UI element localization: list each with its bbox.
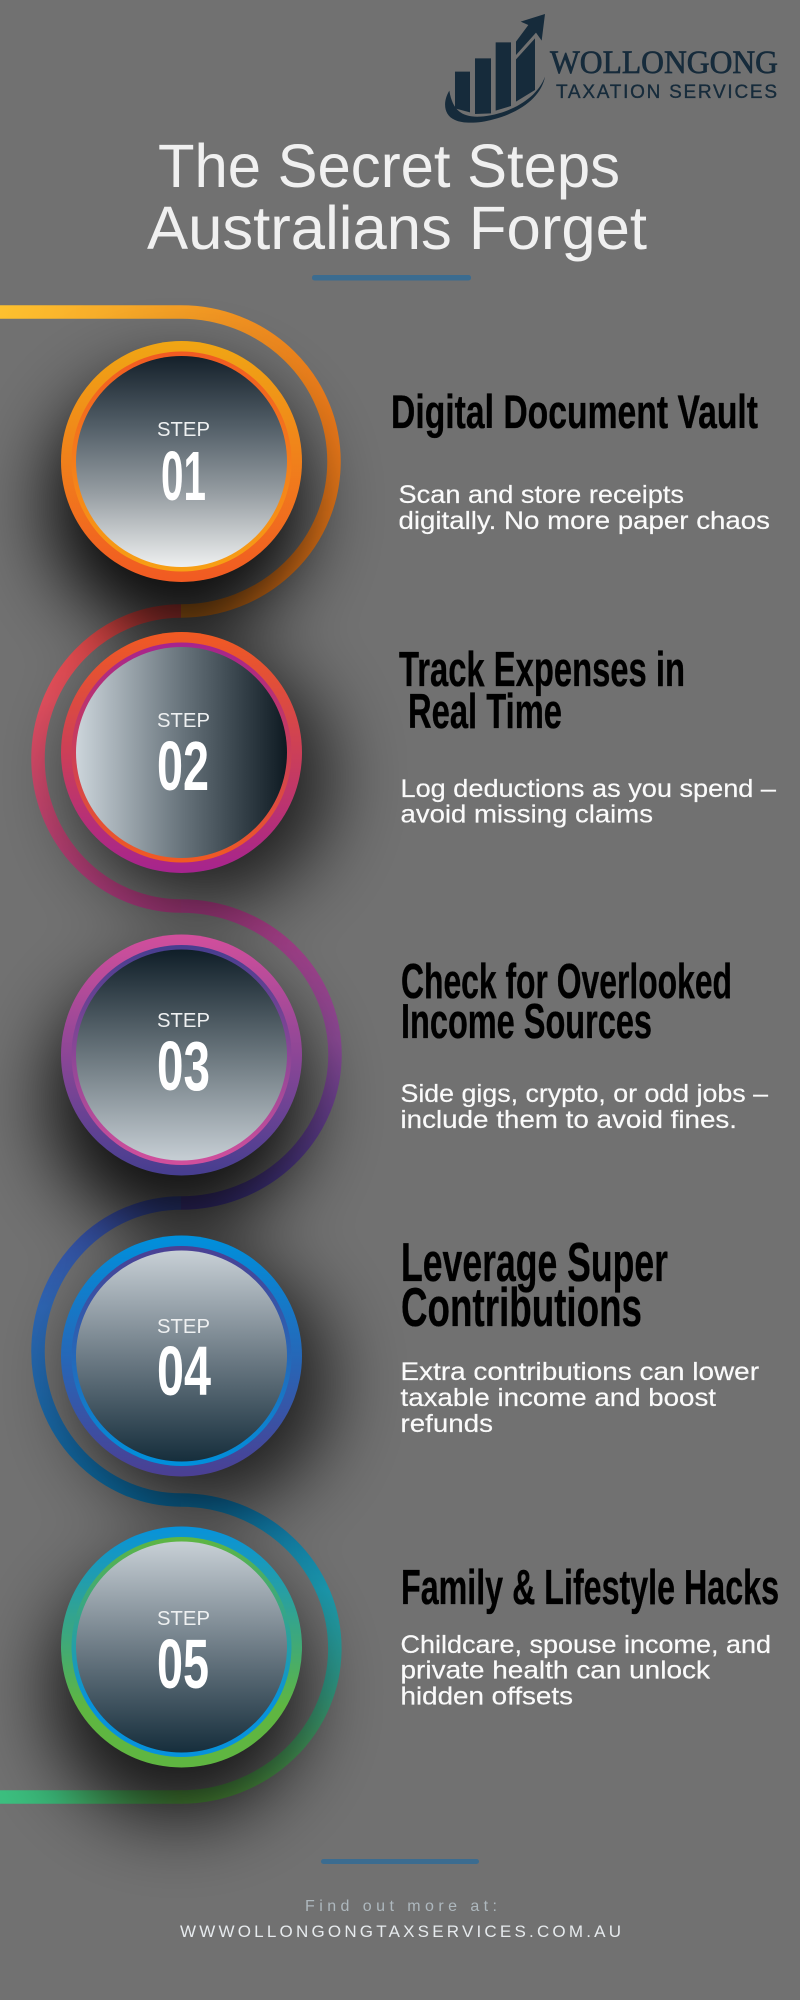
- logo wordmark: WOLLONGONG: [550, 45, 778, 81]
- body: step 2: Log deductions as you spend –: [400, 775, 776, 803]
- body: step 4: [400, 1358, 759, 1438]
- body: step 5: [400, 1631, 771, 1710]
- icon: rising bar chart with arrow: [445, 14, 545, 123]
- panel: step 2 text: [399, 643, 776, 828]
- footer call to action: Find out more at:: [305, 1898, 497, 1915]
- step 02 badge: STEP: [157, 710, 210, 732]
- step 03 badge: 03: [157, 1027, 210, 1105]
- badge drop shadows: [50, 377, 331, 1820]
- step 01 badge: [61, 341, 302, 582]
- logo: Wollongong Taxation Services: [445, 14, 778, 123]
- body: step 4: taxable income and boost: [400, 1384, 716, 1412]
- panel: step 1 text: [391, 385, 770, 535]
- body: step 5: Childcare, spouse income, and: [400, 1631, 771, 1659]
- heading: Check for Overlooked Income Sources: [401, 955, 732, 1049]
- body: step 4: Extra contributions can lower: [400, 1358, 759, 1386]
- step 05 badge: [61, 1526, 302, 1768]
- body: step 2: [400, 775, 776, 828]
- panel: step 4 text: [400, 1231, 759, 1438]
- panel: step 5 text: [400, 1561, 779, 1710]
- title: The Secret Steps: [158, 132, 620, 200]
- title: [147, 132, 647, 262]
- step 05 badge: STEP: [157, 1608, 210, 1630]
- footer call to action: WWWOLLONGONGTAXSERVICES.COM.AU: [180, 1922, 621, 1941]
- step 03 badge: STEP: [157, 1010, 210, 1032]
- body: step 1: Scan and store receipts: [398, 481, 684, 509]
- panel: step 3 text: [400, 955, 768, 1134]
- step 03 badge: [61, 934, 302, 1176]
- footer call to action: [180, 1898, 621, 1941]
- connector ribbon: [0, 312, 335, 1797]
- step 02 badge: 02: [157, 727, 209, 805]
- step 05 badge: 05: [157, 1625, 209, 1703]
- step 01 badge: STEP: [157, 419, 210, 441]
- heading: Leverage Super Contributions: [401, 1231, 668, 1338]
- heading: Track Expenses in Real Time: [399, 643, 685, 739]
- heading: Track Expenses in Real Time: Real Time: [408, 685, 562, 739]
- step 02 badge: [61, 632, 302, 873]
- body: step 2: avoid missing claims: [400, 800, 653, 828]
- step 04 badge: 04: [157, 1332, 211, 1410]
- step 04 badge: [61, 1236, 302, 1476]
- body: step 5: hidden offsets: [400, 1682, 573, 1710]
- body: step 1: digitally. No more paper chaos: [398, 507, 770, 535]
- heading: Check for Overlooked Income Sources: Income Sources: [401, 995, 652, 1049]
- body: step 3: [400, 1080, 768, 1134]
- step 04 badge: STEP: [157, 1316, 210, 1338]
- title: Australians Forget: [147, 194, 647, 262]
- body: step 4: refunds: [400, 1410, 493, 1438]
- body: step 5: private health can unlock: [400, 1656, 711, 1684]
- footer rule: [321, 1859, 479, 1864]
- body: step 1: [398, 481, 770, 535]
- body: step 3: include them to avoid fines.: [400, 1106, 737, 1134]
- body: step 3: Side gigs, crypto, or odd jobs –: [400, 1080, 768, 1108]
- logo tagline: TAXATION SERVICES: [556, 82, 777, 103]
- step 01 badge: 01: [161, 437, 206, 515]
- title underline: [312, 275, 471, 280]
- heading: Leverage Super Contributions: Contributions: [401, 1276, 642, 1338]
